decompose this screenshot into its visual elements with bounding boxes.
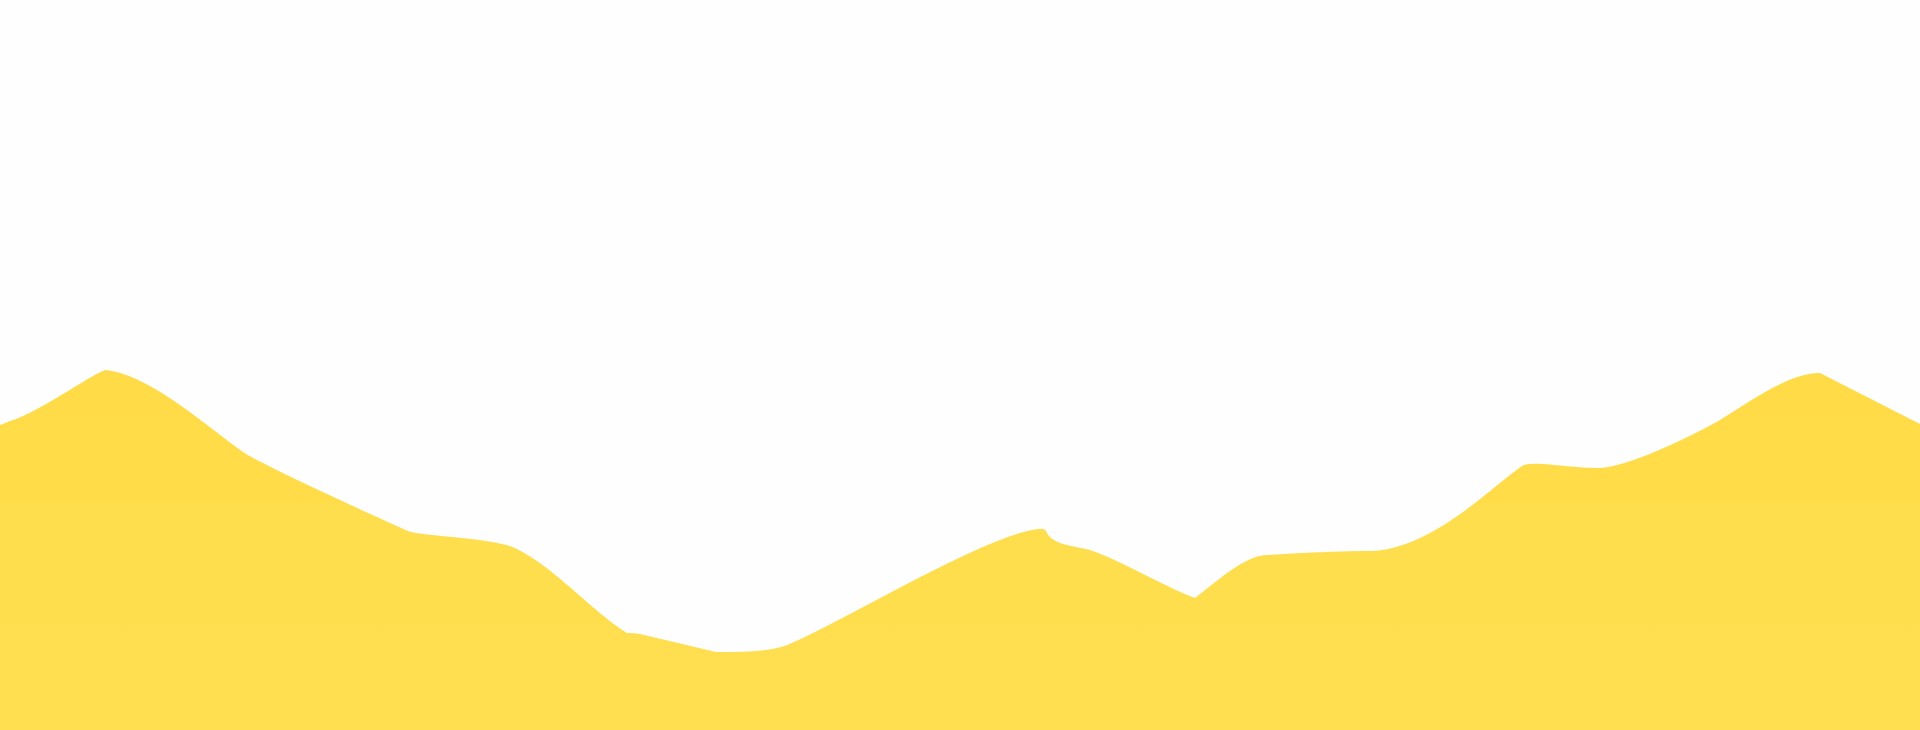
area: hill silhouette [0, 370, 1920, 730]
